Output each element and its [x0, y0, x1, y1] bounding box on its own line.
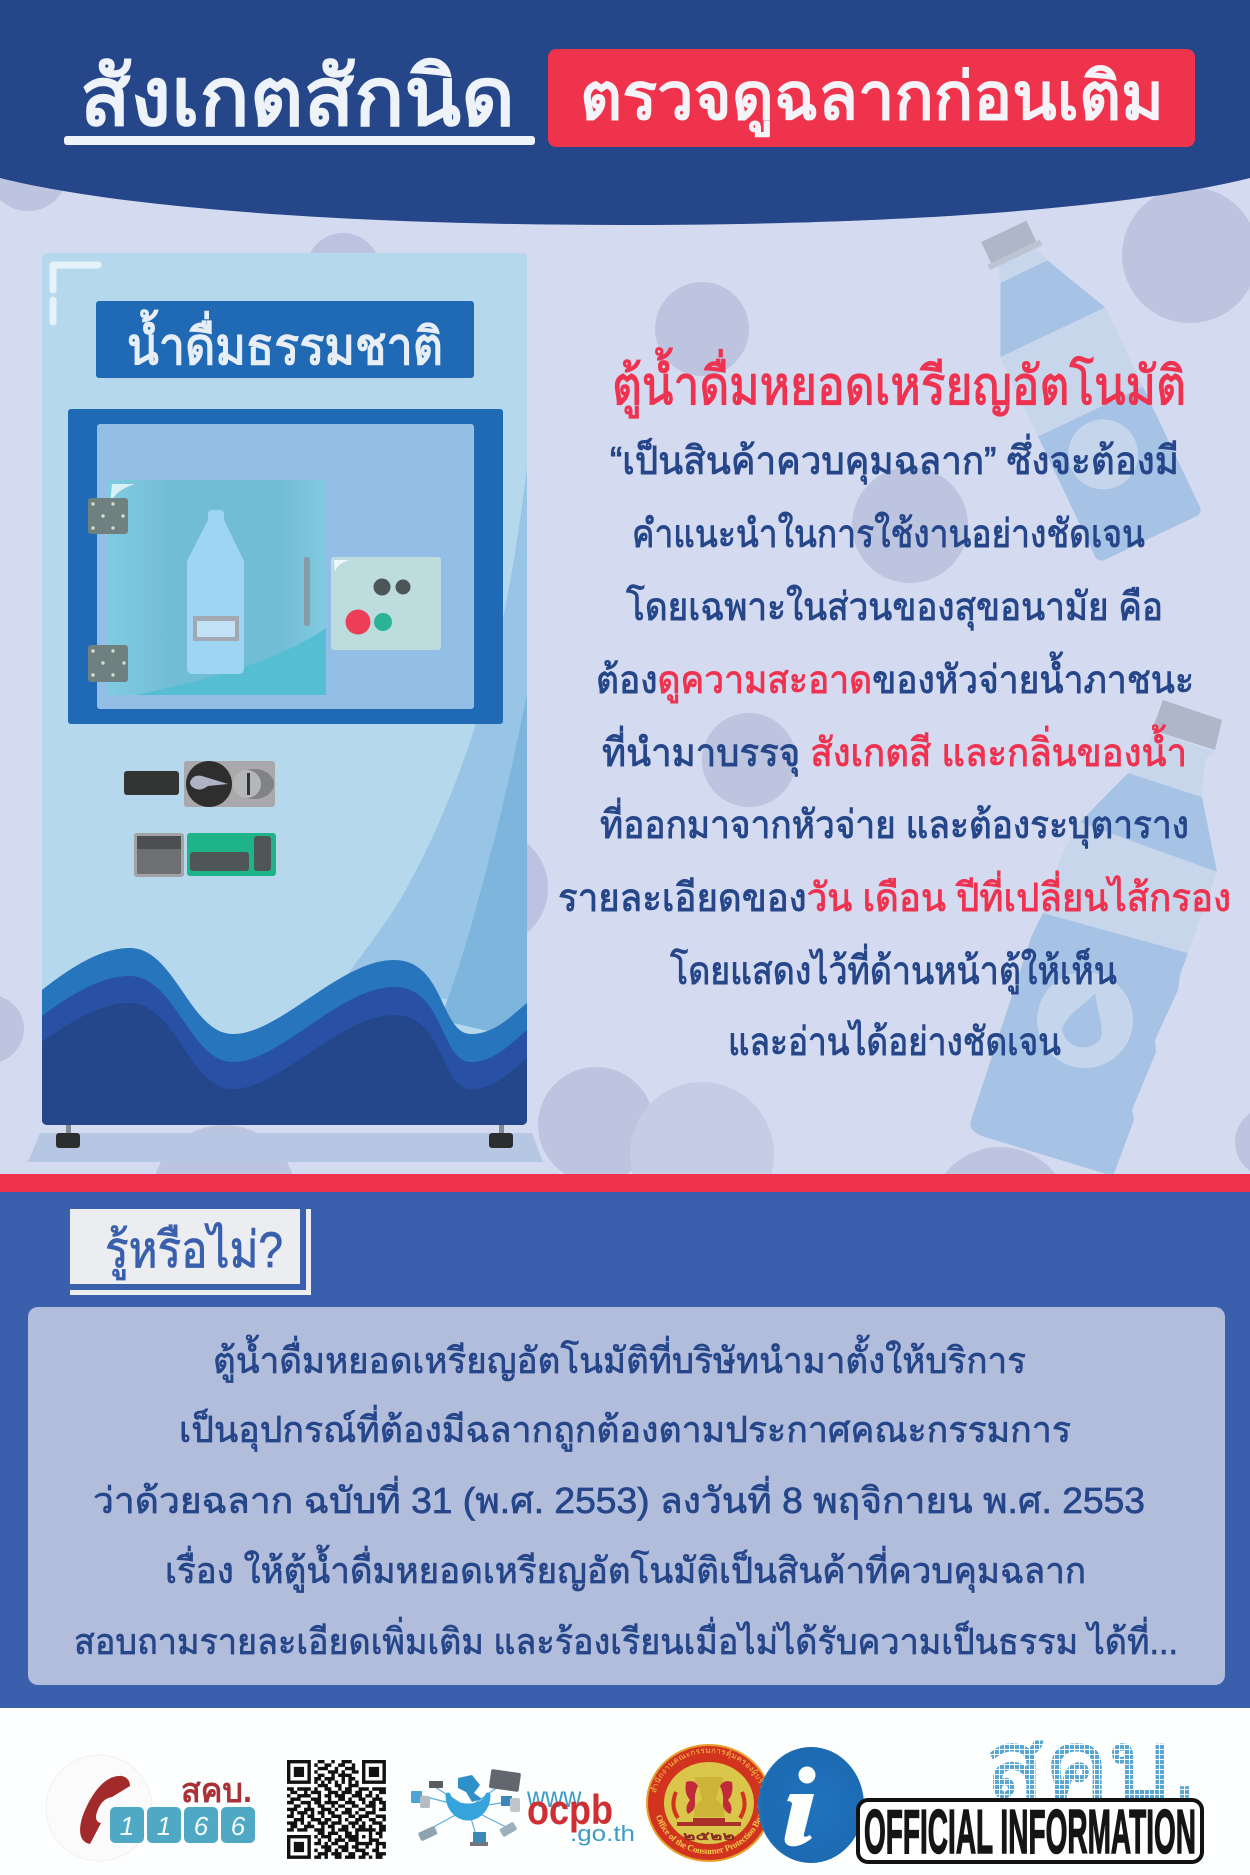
machine base shadow [28, 1133, 543, 1162]
text block: machine labelling information: “เป็นสินค้าควบคุมฉลาก” ซึ่งจะต้องมี [610, 434, 1179, 485]
coin return and payment [134, 833, 276, 877]
logo: consumer protection board seal: สำนักงานคณะกรรมการคุ้มครองผู้บริโภค [650, 1748, 764, 1792]
text panel: ว่าด้วยฉลาก ฉบับที่ 31 (พ.ศ. 2553) ลงวันที่ 8 พฤจิกายน พ.ศ. 2553 [93, 1476, 1145, 1521]
logo: website address: ocpb [527, 1786, 613, 1833]
logo: hotline 1166: สคบ. [181, 1772, 252, 1810]
icon: information symbol [758, 1747, 864, 1863]
door hinges [88, 498, 128, 682]
text block: machine labelling information: ที่ออกมาจากหัวจ่าย และต้องระบุตาราง [600, 798, 1189, 849]
icon: lower background bottle [971, 700, 1222, 1176]
text block: machine labelling information: ต้องดูความสะอาดของหัวจ่ายน้ำภาชนะ [596, 651, 1194, 703]
logo: OCPB dotted wordmark: สคบ. [985, 1712, 1198, 1817]
heading tag: did you know: รู้หรือไม่? [105, 1222, 283, 1280]
text block: machine labelling information: และอ่านได้อย่างชัดเจน [728, 1020, 1061, 1064]
coin slot [124, 761, 275, 807]
icon: QR code [287, 1762, 386, 1857]
text block: machine labelling information: คำแนะนำในการใช้งานอย่างชัดเจน [632, 512, 1145, 556]
logo: hotline 1166 [46, 1755, 255, 1861]
water bottle [187, 510, 244, 674]
text block: machine labelling information: รายละเอียดของวัน เดือน ปีที่เปลี่ยนไส้กรอง [558, 871, 1231, 920]
glass glare [53, 265, 98, 322]
logo: hotline 1166: 1 [120, 1811, 134, 1841]
text panel: สอบถามรายละเอียดเพิ่มเติม และร้องเรียนเมื่อไม่ได้รับความเป็นธรรม ได้ที่... [74, 1617, 1178, 1662]
door handle [304, 557, 310, 626]
logo: hotline 1166: 6 [194, 1811, 209, 1841]
text block: machine labelling information: โดยแสดงไว้ที่ด้านหน้าตู้ให้เห็น [670, 944, 1117, 994]
logo: consumer protection board seal [646, 1744, 765, 1862]
text block: machine labelling information: ที่นำมาบรรจุ สังเกตสี และกลิ่นของน้ำ [602, 724, 1187, 777]
header band [0, 0, 1250, 225]
illustration: vending machine [28, 253, 543, 1162]
heading: red title box [548, 49, 1195, 147]
red divider strip [0, 1174, 1250, 1192]
text panel: ตู้น้ำดื่มหยอดเหรียญอัตโนมัติที่บริษัทนำมาตั้งให้บริการ [213, 1334, 1026, 1383]
text panel: เรื่อง ให้ตู้น้ำดื่มหยอดเหรียญอัตโนมัติเป็นสินค้าที่ควบคุมฉลาก [165, 1544, 1086, 1593]
logo: network globe [411, 1769, 521, 1846]
sign: natural drinking water: น้ำดื่มธรรมชาติ [127, 310, 443, 375]
sign: natural drinking water [96, 301, 474, 378]
heading tag: did you know [70, 1209, 311, 1295]
logo: consumer protection board seal: ๒๕๒๒ [683, 1829, 735, 1843]
text block: machine labelling information: โดยเฉพาะในส่วนของสุขอนามัย คือ [626, 585, 1163, 631]
footer background [0, 1708, 1250, 1875]
logo: website address [526, 1781, 635, 1846]
heading: main title: สังเกตสักนิด [80, 52, 515, 143]
text block: machine labelling information [558, 348, 1231, 1064]
machine body [42, 253, 527, 1125]
window frame [68, 409, 503, 724]
heading: red title box: ตรวจดูฉลากก่อนเติม [580, 59, 1164, 137]
logo: hotline 1166: 6 [231, 1811, 246, 1841]
button panel [331, 557, 441, 650]
logo: website address: .go.th [570, 1821, 635, 1846]
text panel [28, 1307, 1225, 1685]
icon: upper background bottle [952, 206, 1203, 563]
background circles [0, 178, 1250, 1174]
text panel: เป็นอุปกรณ์ที่ต้องมีฉลากถูกต้องตามประกาศคณะกรรมการ [179, 1405, 1071, 1452]
glass door [107, 480, 326, 695]
logo: consumer protection board seal: Office of the Consumer Protection Board [656, 1806, 760, 1854]
logo: website address: www. [526, 1781, 587, 1814]
machine feet [56, 1125, 513, 1148]
logo: hotline 1166: 1 [157, 1811, 171, 1841]
panel: did you know [0, 1192, 1250, 1708]
